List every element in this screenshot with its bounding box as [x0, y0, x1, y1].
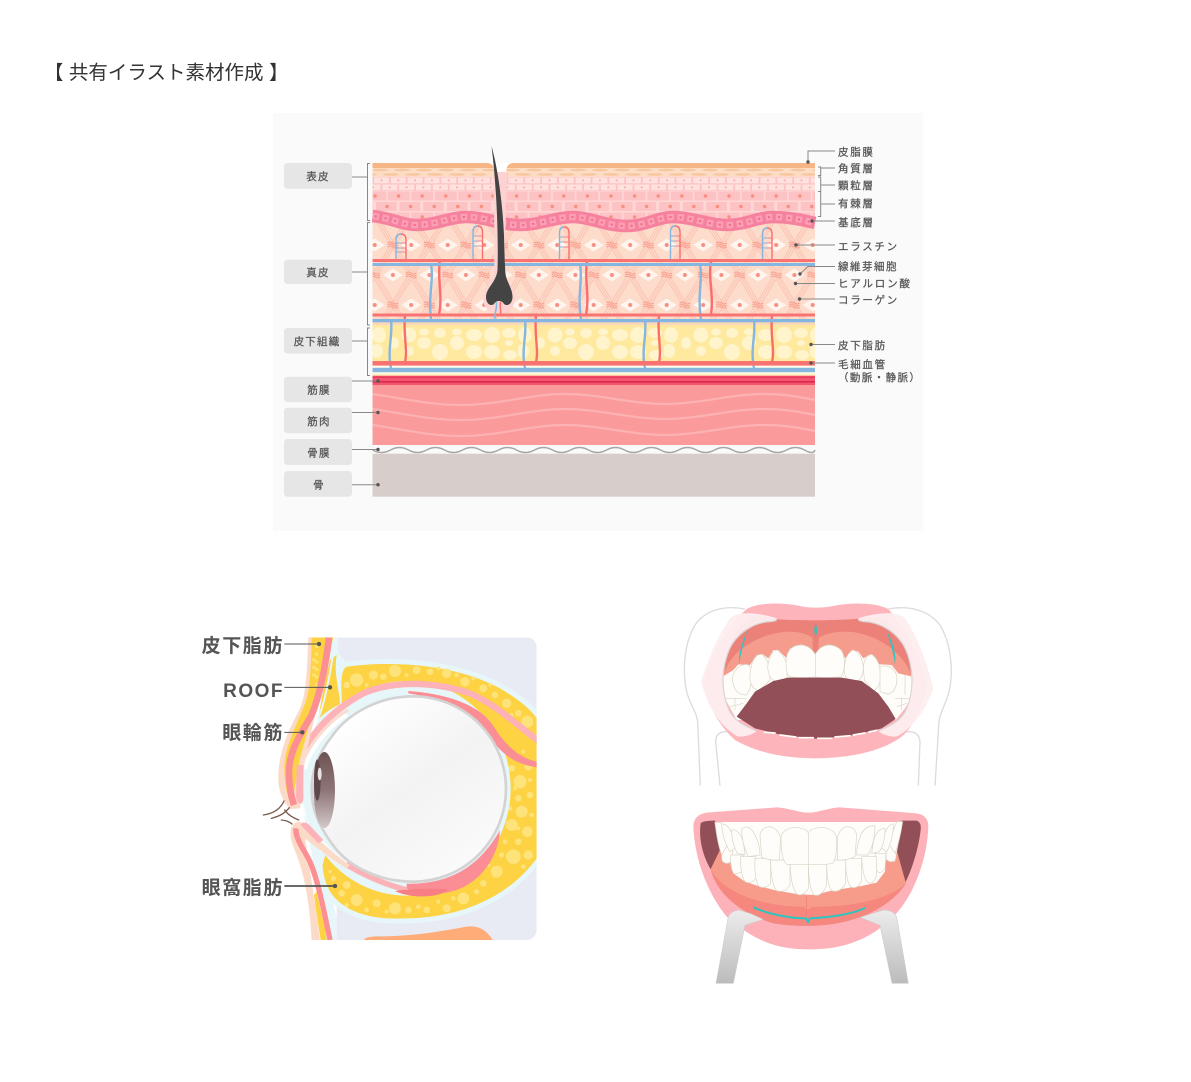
basal layer	[372, 216, 815, 226]
hair and follicle	[483, 146, 515, 320]
lower teeth edge	[764, 730, 877, 738]
lower teeth mouth	[693, 807, 928, 983]
label: 骨	[284, 471, 352, 497]
iris	[314, 752, 335, 828]
medial tissue	[300, 637, 347, 940]
skin layers	[372, 163, 815, 376]
eye leader lines	[284, 642, 337, 888]
bone	[372, 454, 815, 497]
right labels: 基底層	[838, 216, 875, 229]
right labels: エラスチン	[838, 241, 899, 253]
left brackets and leaders	[352, 164, 380, 486]
left retractor	[716, 910, 763, 983]
right labels: 毛細血管	[838, 358, 887, 371]
eye labels	[202, 635, 284, 899]
label: 真皮: 真皮	[306, 266, 330, 279]
upper teeth mouth	[684, 603, 951, 786]
orbital fat	[323, 664, 537, 919]
label: 骨膜: 骨膜	[307, 448, 331, 460]
panel: skin cross-section	[273, 113, 923, 531]
right labels	[838, 146, 921, 384]
eye labels: 皮下脂肪	[202, 635, 284, 657]
label: 筋膜: 筋膜	[307, 384, 331, 396]
gums	[723, 617, 912, 695]
lower teeth row	[715, 822, 903, 895]
retractors	[701, 613, 933, 737]
cyan line	[753, 907, 865, 922]
upper teeth	[723, 644, 913, 720]
title: 【 共有イラスト素材作成 】	[44, 62, 288, 84]
right labels: 皮下脂肪	[838, 339, 887, 352]
upper teeth row	[715, 822, 903, 864]
lower eyelid muscles	[337, 830, 500, 896]
label: 骨膜	[284, 439, 352, 465]
periosteum	[372, 448, 815, 452]
cyan marks	[739, 623, 895, 664]
lower orbital pad	[364, 926, 493, 940]
right labels: 顆粒層	[838, 179, 875, 192]
label: 皮下組織: 皮下組織	[294, 335, 340, 348]
label: 表皮	[284, 163, 352, 189]
fascia	[372, 376, 815, 386]
upper eyelid muscles	[299, 684, 540, 768]
right labels: （動脈・静脈）	[838, 371, 921, 384]
eye diagram	[202, 635, 540, 940]
mouth cavity	[737, 678, 896, 739]
label: 表皮: 表皮	[306, 170, 330, 183]
label: 筋膜	[284, 377, 352, 402]
right labels: 皮脂膜	[838, 146, 875, 158]
eyelashes	[263, 801, 299, 824]
face outline	[684, 608, 951, 786]
right labels: コラーゲン	[838, 294, 899, 306]
right retractor	[860, 910, 908, 983]
eyeball	[305, 696, 506, 882]
label: 皮下組織	[284, 328, 352, 354]
gums	[711, 821, 906, 926]
muscle	[372, 385, 815, 445]
right labels: 線維芽細胞	[838, 260, 898, 273]
eye labels: 眼輪筋	[222, 722, 284, 744]
right labels: 角質層	[838, 162, 875, 175]
capillary loops	[396, 226, 772, 260]
left labels	[284, 163, 352, 497]
right leaders	[794, 151, 835, 365]
right labels: 有棘層	[838, 197, 875, 210]
orbital roof fat	[318, 655, 340, 719]
eye labels: 眼窩脂肪	[202, 877, 284, 899]
lips	[703, 603, 927, 758]
orbit background	[337, 637, 537, 940]
orbital tissue	[303, 681, 511, 896]
label: 骨: 骨	[313, 480, 325, 492]
vertical vessels	[390, 260, 773, 368]
lips	[693, 807, 928, 949]
label: 真皮	[284, 260, 352, 284]
face profile	[278, 637, 350, 940]
horizontal vessels	[372, 259, 815, 372]
eye labels: ROOF	[223, 681, 284, 702]
label: 筋肉: 筋肉	[307, 415, 331, 428]
label: 筋肉	[284, 408, 352, 433]
right labels: ヒアルロン酸	[838, 277, 912, 290]
mouth corners	[700, 821, 921, 883]
